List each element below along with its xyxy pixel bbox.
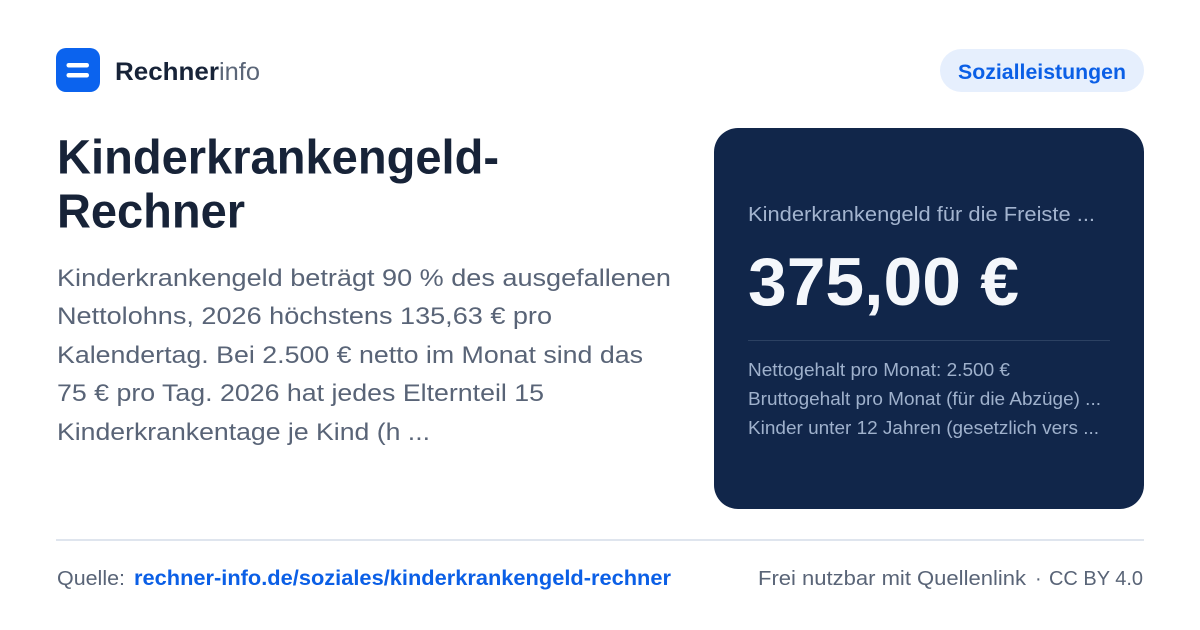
description text: Kinderkrankengeld beträgt 90 % des ausgefallenen [57, 265, 671, 292]
license note: · [1035, 568, 1042, 590]
title [57, 132, 499, 238]
input list: Kinder unter 12 Jahren (gesetzlich vers ... [748, 418, 1099, 438]
category badge: Sozialleistungen [958, 61, 1126, 84]
description text [57, 265, 671, 446]
description text: 75 € pro Tag. 2026 hat jedes Elternteil 15 [57, 380, 544, 407]
title: Rechner [57, 186, 245, 238]
icon: logo [56, 48, 100, 92]
license note: CC BY 4.0 [1049, 568, 1143, 590]
input list: Nettogehalt pro Monat: 2.500 € [748, 360, 1010, 380]
source line: rechner-info.de/soziales/kinderkrankengeld-rechner [134, 567, 671, 590]
description text: Kinderkrankentage je Kind (h ... [57, 419, 430, 446]
brand name: info [219, 58, 260, 86]
brand name: Rechner [115, 58, 219, 86]
panel: result card [714, 128, 1144, 509]
title: Kinderkrankengeld- [57, 132, 499, 184]
source line: Quelle: [57, 568, 125, 590]
license note: Frei nutzbar mit Quellenlink [758, 568, 1027, 590]
category badge [940, 49, 1144, 92]
brand name [115, 58, 260, 86]
input list: Bruttogehalt pro Monat (für die Abzüge) ... [748, 389, 1101, 409]
description text: Kalendertag. Bei 2.500 € netto im Monat sind das [57, 342, 643, 369]
license note [758, 568, 1143, 590]
result value: 375,00 € [748, 244, 1019, 320]
description text: Nettolohns, 2026 höchstens 135,63 € pro [57, 303, 552, 330]
card label: Kinderkrankengeld für die Freiste ... [748, 204, 1095, 226]
input list [748, 360, 1101, 438]
